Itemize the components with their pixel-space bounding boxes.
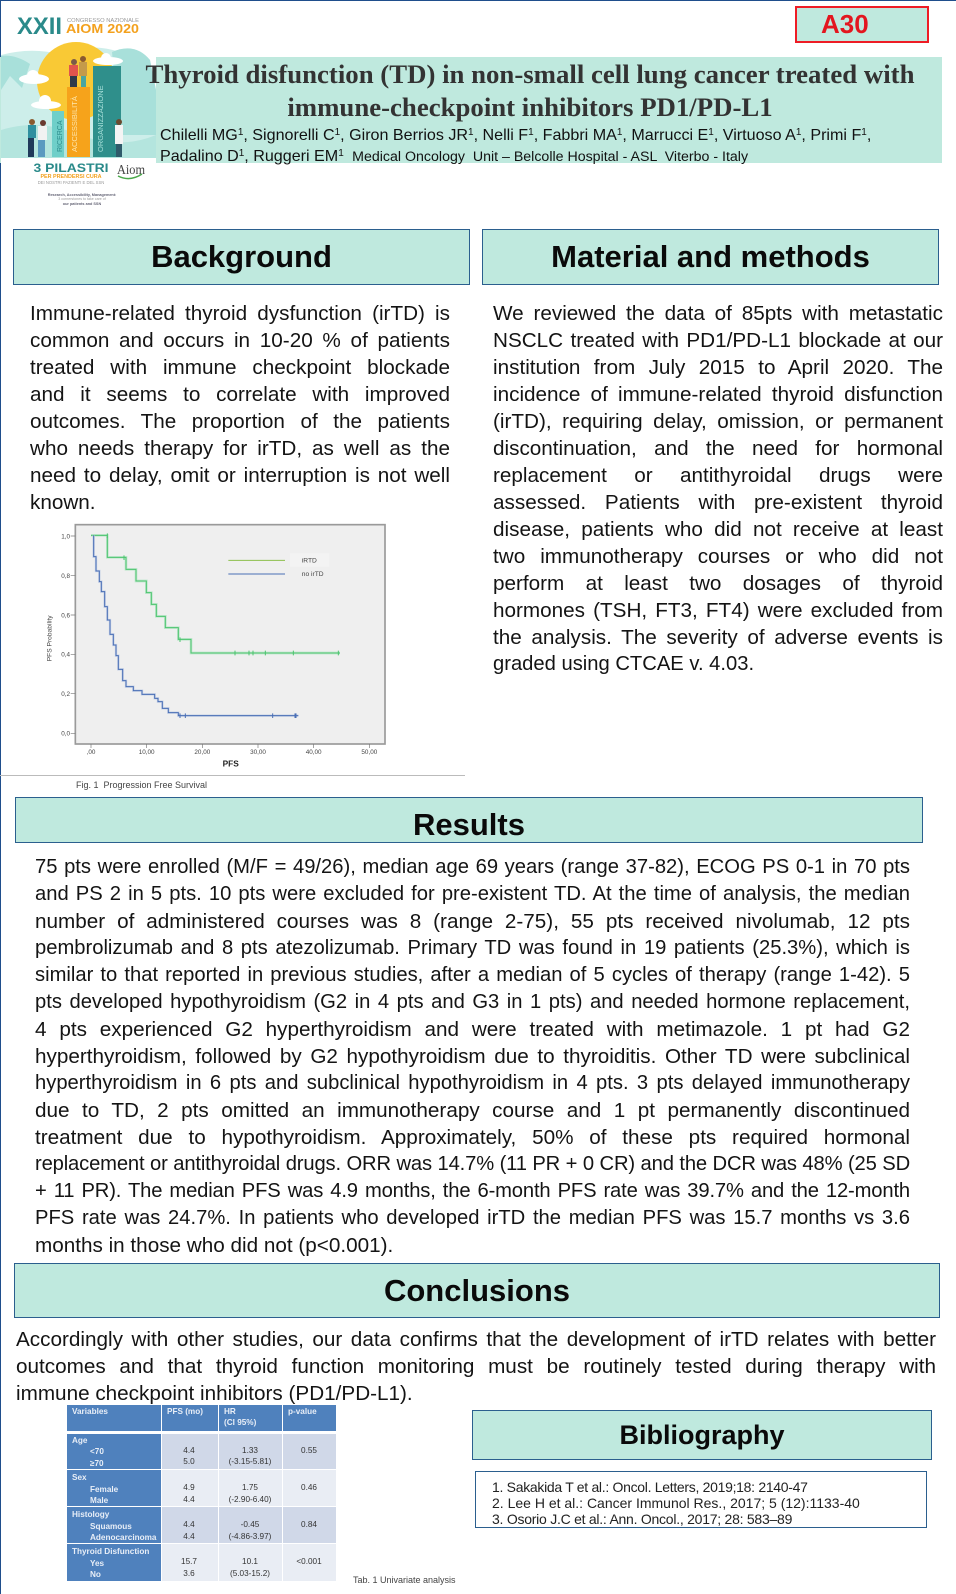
logo pillars: ACCESSIBILITÀ xyxy=(70,96,79,152)
row: histology: -0.45 xyxy=(241,1520,260,1529)
axes and tick labels: 1,0 xyxy=(61,533,70,540)
text: material and methods: hormones (TSH, FT3, FT4) were excluded from xyxy=(493,599,943,622)
row: thyroid disfunction: 3.6 xyxy=(183,1569,195,1578)
text: results: hyperthyroidism, followed by G2 hypothyroidism due to thyroiditis. Other TD were subclinical xyxy=(35,1045,910,1068)
table header: p-value xyxy=(288,1407,317,1416)
text: background: treated with immune checkpoint blockade xyxy=(30,356,450,379)
axes and tick labels: 0,8 xyxy=(61,573,70,580)
text: results: PFS rate was 24.7%. In patients who developed irTD the median PFS was 15.7 months vs 3.6 xyxy=(35,1207,910,1229)
badge: A30: A30 xyxy=(821,9,869,39)
axes and tick labels: 0,0 xyxy=(61,731,70,738)
row: age: ≥70 xyxy=(90,1459,104,1468)
text: background: common and occurs in 10-20 % of patients xyxy=(30,329,450,352)
text: material and methods: assessed. Patients with pre-existent thyroid xyxy=(493,491,943,514)
text: material and methods: institution from July 2015 to April 2020. The xyxy=(493,356,943,379)
logo tagline: PER PRENDERSI CURA xyxy=(40,174,102,180)
row: histology: 4.4 xyxy=(183,1520,195,1529)
axes and tick labels: 50,00 xyxy=(361,749,378,756)
logo tagline: DEI NOSTRI PAZIENTI E DEL SSN xyxy=(38,180,104,185)
heading: Results: Results xyxy=(413,806,525,842)
logo wordmark: AIOM 2020 xyxy=(66,22,139,36)
row: thyroid disfunction: <0.001 xyxy=(296,1557,322,1566)
row: sex: 4.4 xyxy=(183,1495,195,1504)
legend: no irTD xyxy=(302,571,324,578)
text: results: treatment due to hypothyroidism. Approximately, 50% of these pts required hormonal xyxy=(35,1126,910,1149)
row: thyroid disfunction xyxy=(67,1544,336,1581)
bibliography list: 3. Osorio J.C et al.: Ann. Oncol., 2017; 28: 583–89 xyxy=(492,1511,792,1527)
text: background: and it seems to correlate with improved xyxy=(30,383,450,406)
text: results: pembrolizumab and 8 pts atezolizumab. Primary TD was found in 19 patients (25.3%), which is xyxy=(35,937,910,959)
row: age: 5.0 xyxy=(183,1457,195,1466)
row: thyroid disfunction: (5.03-15.2) xyxy=(230,1569,270,1578)
text: results: and PS 2 in 5 pts. 10 pts were excluded for pre-existent TD. At the time of analysis, the median xyxy=(35,883,910,905)
text: conclusions: Accordingly with other studies, our data confirms that the development of irTD relates with better xyxy=(16,1328,936,1351)
row: thyroid disfunction: Yes xyxy=(90,1559,105,1568)
row: sex: 0.46 xyxy=(301,1483,317,1492)
text: results: months in those who did not (p<0.001). xyxy=(35,1234,393,1257)
text: background: need to delay, omit or interruption is not well xyxy=(30,464,450,487)
text: material and methods: two immunotherapy courses or who did not xyxy=(493,545,943,568)
row: sex xyxy=(67,1470,336,1506)
text: results: number of administered courses was 8 (range 2-75), 55 pts received nivolumab, 12 pts xyxy=(35,910,910,933)
row: sex: Male xyxy=(90,1496,109,1505)
row: sex: (-2.90-6.40) xyxy=(229,1495,272,1504)
axes and tick labels: ,00 xyxy=(87,749,96,756)
text: results: replacement or antithyroidal drugs. ORR was 14.7% (11 PR + 0 CR) and the DCR was 48% (25 SD xyxy=(35,1153,910,1175)
row: sex: 4.9 xyxy=(183,1483,195,1492)
row: age: 1.33 xyxy=(242,1446,258,1455)
axes and tick labels: 0,4 xyxy=(61,652,70,659)
row: age: Age xyxy=(72,1436,88,1445)
row: sex: Sex xyxy=(72,1473,87,1482)
axes and tick labels: 10,00 xyxy=(139,749,155,756)
plot area xyxy=(75,525,385,744)
logo tagline: our patients and SSN xyxy=(63,202,101,206)
axes and tick labels: 30,00 xyxy=(250,749,266,756)
table header: PFS (mo) xyxy=(167,1407,203,1416)
logo pillars xyxy=(52,66,121,157)
text: results xyxy=(35,856,910,1257)
authors and affiliation xyxy=(160,126,871,165)
text: material and methods: (irTD), requiring delay, omission, or permanent xyxy=(493,410,943,433)
text: results: hyperthyroidism in 6 pts and subclinical hypothyroidism in 4 pts. 3 pts delayed immunotherapy xyxy=(35,1072,910,1094)
heading: Material and methods xyxy=(482,229,939,285)
table header: (CI 95%) xyxy=(224,1418,257,1427)
bibliography list: 1. Sakakida T et al.: Oncol. Letters, 2019;18: 2140-47 xyxy=(492,1479,808,1495)
text: material and methods: We reviewed the data of 85pts with metastatic xyxy=(493,302,943,325)
table: univariate analysis xyxy=(67,1405,336,1581)
table header: HR xyxy=(224,1407,236,1416)
text: conclusions: immune checkpoint inhibitors (PD1/PD-L1). xyxy=(16,1382,413,1405)
legend: iRTD xyxy=(302,558,317,565)
text: results: + 11 PR). The median PFS was 4.9 months, the 6-month PFS rate was 39.7% and the 12-month xyxy=(35,1180,910,1202)
row: histology: Squamous xyxy=(90,1522,132,1531)
row: age: (-3.15-5.81) xyxy=(229,1457,272,1466)
axes and tick labels: 0,6 xyxy=(61,612,70,619)
caption: figure 1: Fig. 1 Progression Free Survival xyxy=(76,780,207,790)
divider under chart xyxy=(0,775,465,776)
caption: table 1: Tab. 1 Univariate analysis xyxy=(353,1575,456,1585)
text: results: 75 pts were enrolled (M/F = 49/26), median age 69 years (range 37-82), ECOG PS 0-1 in 70 pts xyxy=(35,856,910,878)
text: results: pts developed hypothyroidism (G2 in 4 pts and G3 in 1 pts) and needed hormone replacement, xyxy=(35,991,910,1013)
text: material and methods xyxy=(493,302,943,675)
text: material and methods: perform at least two dosages of thyroid xyxy=(493,572,943,595)
row: histology xyxy=(67,1507,336,1543)
logo tagline: Aiom xyxy=(117,163,145,178)
text: material and methods: graded using CTCAE v. 4.03. xyxy=(493,653,754,675)
heading: Material and methods: Material and methods xyxy=(551,239,870,274)
text: background: known. xyxy=(30,491,96,514)
text: results: similar to that reported in previous studies, after a median of 5 cycles of therapy (range 1-42). 5 xyxy=(35,964,910,986)
row: histology: Adenocarcinoma xyxy=(90,1533,157,1542)
text: background xyxy=(30,302,450,514)
heading: Bibliography: Bibliography xyxy=(619,1420,784,1450)
row: histology: 4.4 xyxy=(183,1532,195,1541)
badge: A30 xyxy=(795,6,929,43)
axes and tick labels: 40,00 xyxy=(306,749,322,756)
authors and affiliation: Padalino D1, Ruggeri EM1 Medical Oncology Unit – Belcolle Hospital - ASL Viterbo - Italy xyxy=(160,147,748,165)
chart: progression free survival xyxy=(46,524,386,769)
survival curve: irTD xyxy=(91,533,340,655)
title: immune-checkpoint inhibitors PD1/PD-L1 xyxy=(287,92,773,122)
axes and tick labels: 20,00 xyxy=(194,749,211,756)
row: age: 4.4 xyxy=(183,1446,195,1455)
text: material and methods: replacement or antithyroidal drugs were xyxy=(493,464,943,487)
row: sex: Female xyxy=(90,1485,119,1494)
row: histology: (-4.86-3.97) xyxy=(229,1532,272,1541)
logo wordmark: XXII xyxy=(17,13,62,40)
text: material and methods: disease, patients who did not receive at least xyxy=(493,518,943,541)
axes and tick labels: 0,2 xyxy=(61,691,70,698)
table header: Variables xyxy=(72,1407,108,1416)
axes and tick labels xyxy=(46,533,378,769)
heading: Results xyxy=(15,797,923,843)
heading: Bibliography xyxy=(472,1410,932,1460)
row: histology: 0.84 xyxy=(301,1520,317,1529)
text: conclusions: outcomes and that thyroid function monitoring must be routinely tested during therapy with xyxy=(16,1355,936,1378)
logo wordmark: CONGRESSO NAZIONALE xyxy=(67,18,139,24)
logo pillars: RICERCA xyxy=(57,120,64,152)
row: age xyxy=(67,1434,336,1469)
text: background: Immune-related thyroid dysfunction (irTD) is xyxy=(30,302,450,325)
text: material and methods: discontinuation, and the need for hormonal xyxy=(493,437,943,460)
text: material and methods: NSCLC treated with PD1/PD-L1 blockade at our xyxy=(493,329,943,352)
bibliography list xyxy=(475,1471,927,1528)
text: conclusions xyxy=(16,1328,936,1405)
row: sex: 1.75 xyxy=(242,1483,258,1492)
logo: AIOM 2020 congress xyxy=(1,13,156,206)
row: thyroid disfunction: Thyroid Disfunction xyxy=(72,1547,149,1556)
row: thyroid disfunction: 15.7 xyxy=(181,1557,197,1566)
text: material and methods: the analysis. The severity of adverse events is xyxy=(493,626,943,649)
axes and tick labels: PFS Probability xyxy=(46,615,53,661)
logo clouds xyxy=(19,53,123,109)
title xyxy=(146,59,914,122)
axes and tick labels: PFS xyxy=(223,759,239,769)
logo pillars: ORGANIZZAZIONE xyxy=(96,85,105,152)
logo tagline xyxy=(34,161,145,206)
logo tagline: 3 cornerstones to take care of xyxy=(58,197,106,201)
logo people xyxy=(28,56,123,157)
logo tagline: 3 PILASTRI xyxy=(34,161,108,175)
text: results: due to TD, 2 pts omitted an immunotherapy course and 1 pt permanently discontinued xyxy=(35,1099,910,1122)
heading: Conclusions: Conclusions xyxy=(384,1272,570,1308)
header band xyxy=(0,57,942,163)
row: thyroid disfunction: No xyxy=(90,1570,101,1579)
table header xyxy=(67,1405,336,1431)
row: histology: Histology xyxy=(72,1510,110,1519)
logo wordmark xyxy=(17,13,139,40)
text: background: outcomes. The proportion of the patients xyxy=(30,410,450,433)
authors and affiliation: Chilelli MG1, Signorelli C1, Giron Berrios JR1, Nelli F1, Fabbri MA1, Marrucci E1, Virtuoso A1, Primi F1, xyxy=(160,126,871,144)
text: results: 4 pts experienced G2 hyperthyroidism and were treated with metimazole. 1 pt had G2 xyxy=(35,1018,910,1041)
row: age: 0.55 xyxy=(301,1446,317,1455)
logo tagline: Research, Accessibility, Management: xyxy=(48,193,116,197)
heading: Background xyxy=(13,229,470,285)
title: Thyroid disfunction (TD) in non-small cell lung cancer treated with xyxy=(146,59,914,89)
heading: Conclusions xyxy=(14,1263,940,1318)
bibliography list: 2. Lee H et al.: Cancer Immunol Res., 2017; 5 (12):1133-40 xyxy=(492,1495,860,1511)
heading: Background: Background xyxy=(151,239,332,274)
text: background: who needs therapy for irTD, as well as the xyxy=(30,437,450,460)
row: thyroid disfunction: 10.1 xyxy=(242,1557,258,1566)
row: age: <70 xyxy=(90,1447,104,1456)
text: material and methods: incidence of immune-related thyroid disfunction xyxy=(493,383,943,406)
survival curve: no irTD xyxy=(94,535,298,718)
legend xyxy=(228,553,329,578)
